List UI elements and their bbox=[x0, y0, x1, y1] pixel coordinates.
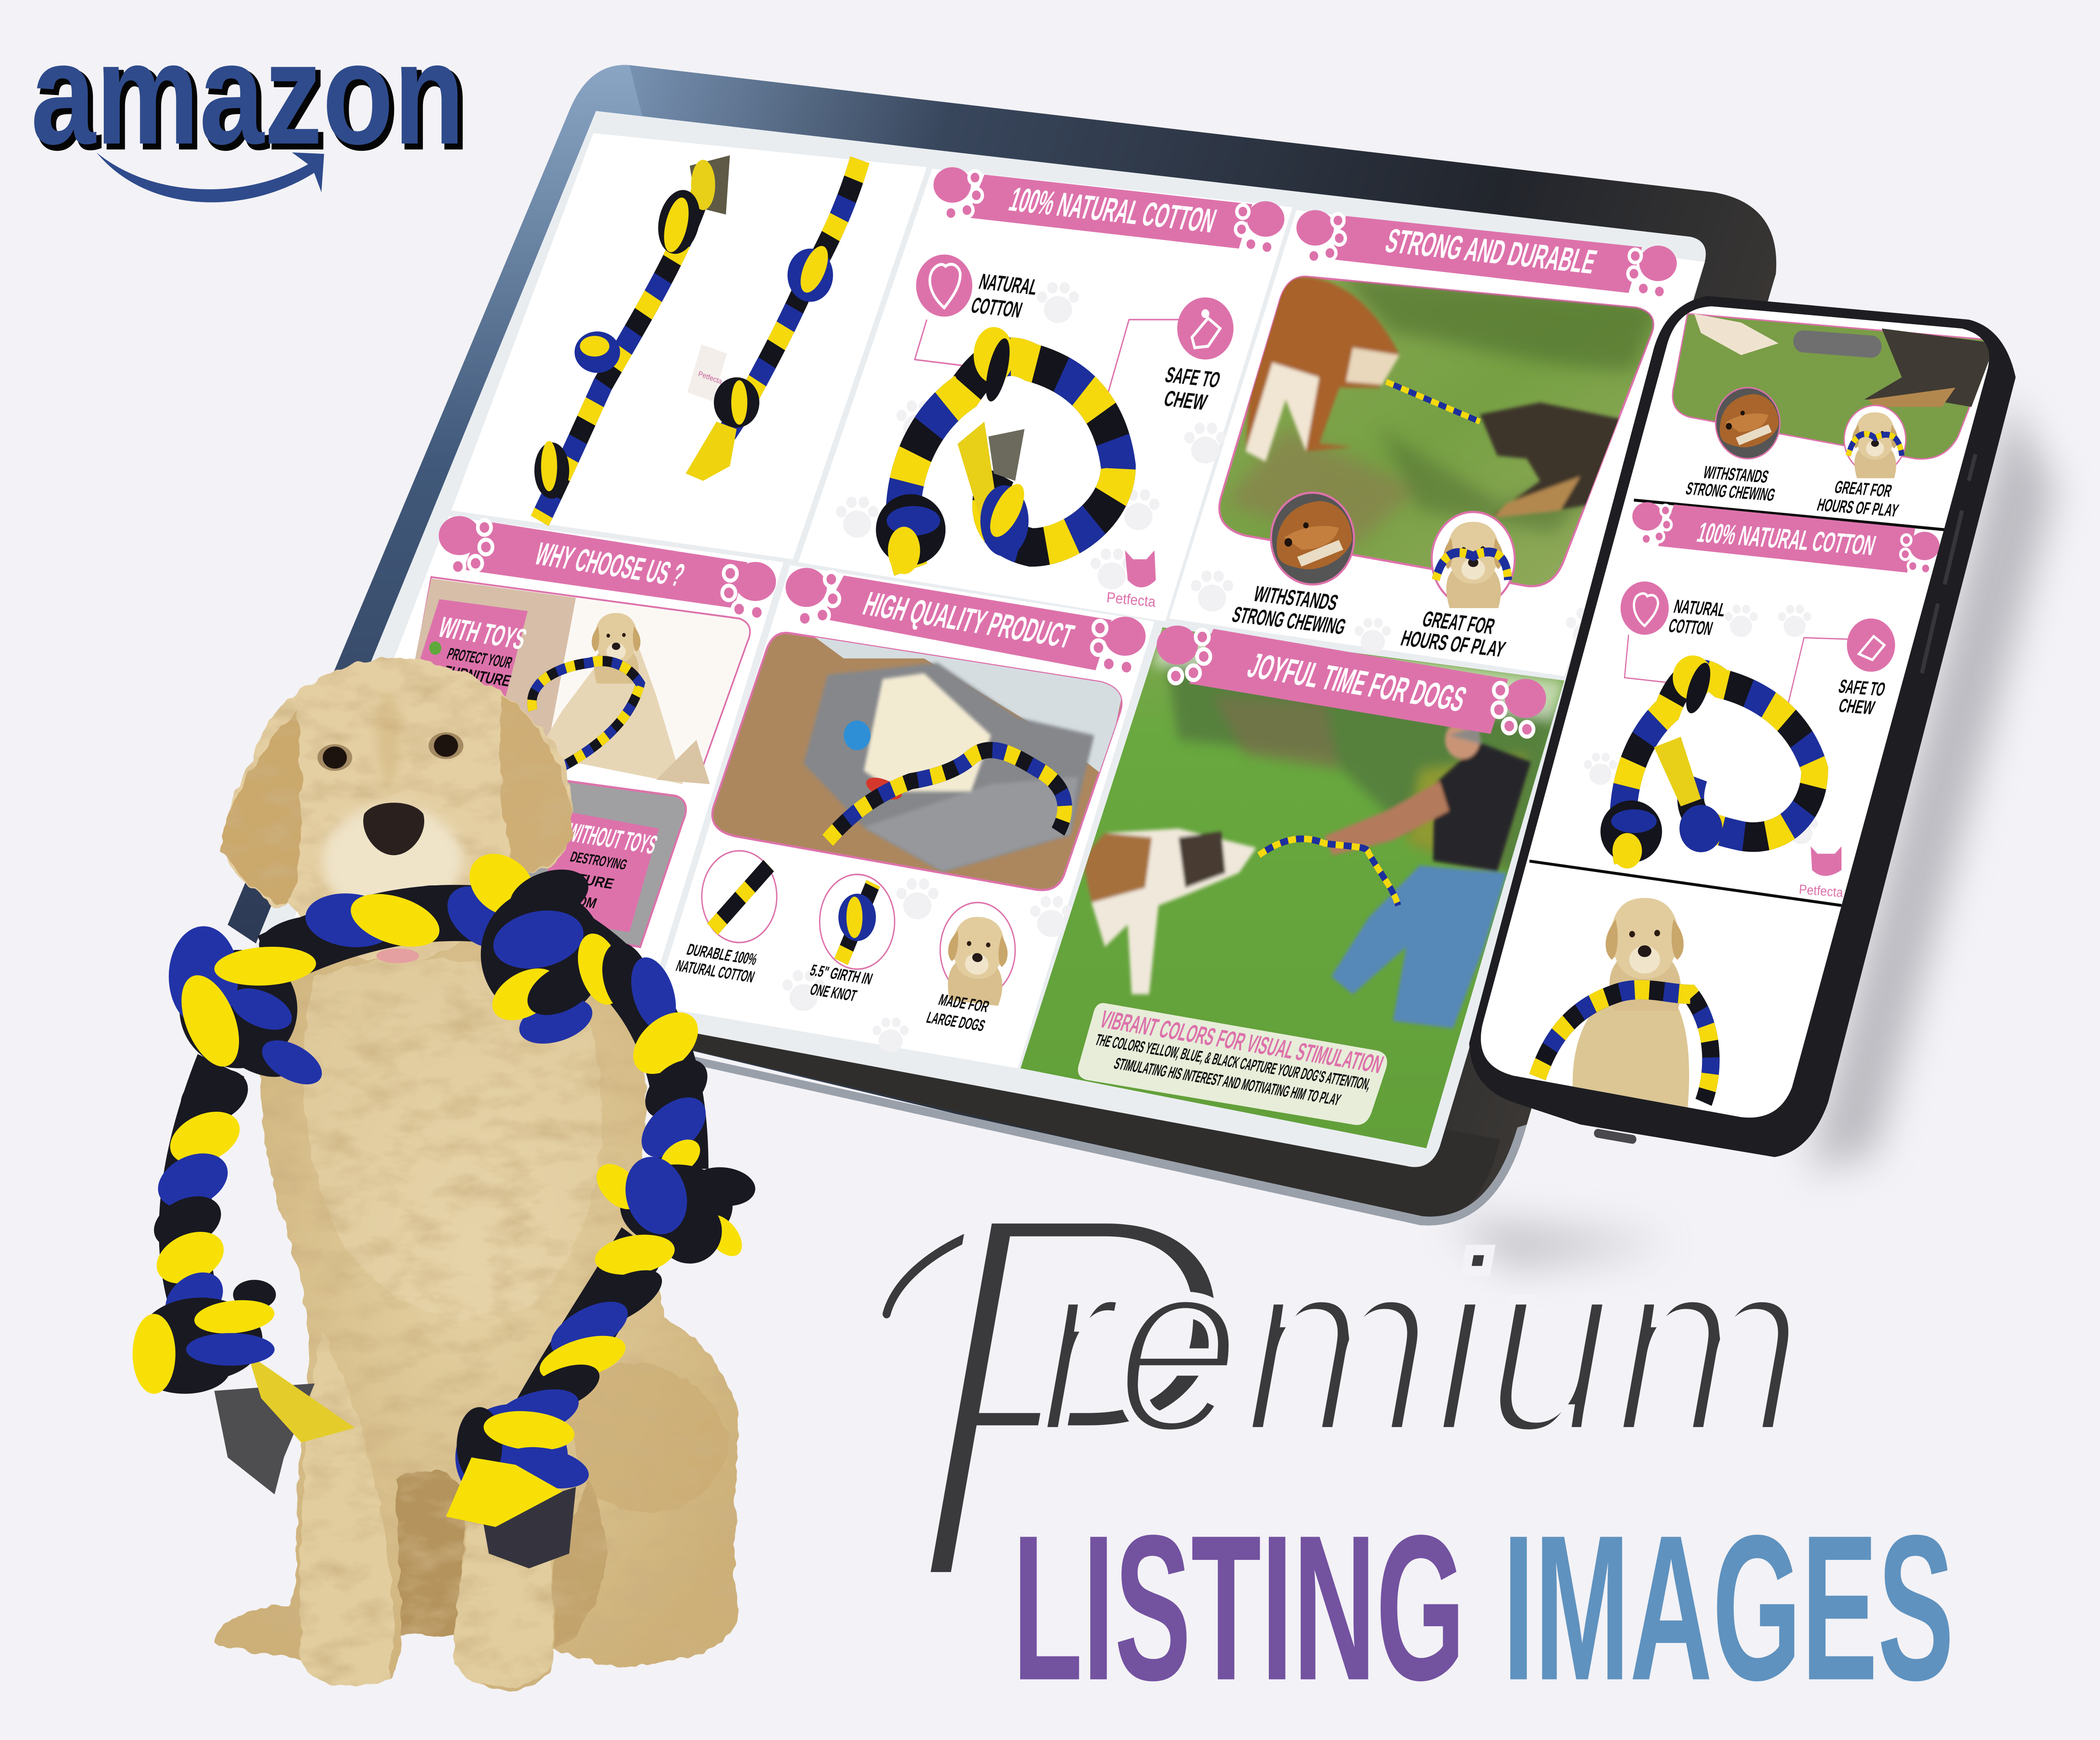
mini rope bbox=[532, 661, 640, 777]
tablet left edge bbox=[228, 65, 643, 947]
Premium word: P bbox=[900, 1091, 1233, 1702]
tablet body bbox=[228, 65, 1776, 1226]
right eye bbox=[428, 732, 463, 759]
with toys card: WITH TOYS bbox=[434, 611, 530, 656]
phone icon: cotton bbox=[1620, 582, 1669, 635]
phone divider one bbox=[1634, 500, 1945, 530]
callout: vibrant colors: THE COLORS YELLOW, BLUE, & BLACK CAPTURE YOUR DOG'S ATTENTION, bbox=[1093, 1031, 1374, 1093]
Petfecta logo: Petfecta bbox=[1106, 590, 1156, 610]
watermark paws bbox=[1191, 571, 1608, 653]
phone label withstands: WITHSTANDS bbox=[1701, 462, 1771, 487]
chest highlight bbox=[303, 958, 602, 1320]
label withstands strong chewing bbox=[1229, 581, 1349, 639]
panel: why choose us bbox=[295, 516, 783, 976]
rope through mouth bbox=[303, 841, 545, 961]
photo: without toys: WITHOUT TOYS bbox=[563, 818, 661, 859]
title: Premium bbox=[887, 1091, 1805, 1702]
label safe to chew bbox=[1161, 362, 1223, 415]
label great for hours of play: GREAT FOR bbox=[1420, 606, 1498, 639]
man bbox=[1325, 721, 1531, 1028]
rope on bed bbox=[828, 750, 1065, 840]
with toys card bbox=[409, 599, 530, 710]
phone label natural cotton bbox=[1666, 596, 1728, 639]
label natural cotton: NATURAL bbox=[976, 269, 1041, 299]
label girth: ONE KNOT bbox=[808, 980, 859, 1005]
phone body bbox=[1469, 296, 2016, 1157]
banner bbox=[1328, 216, 1642, 293]
label large dogs: LARGE DOGS bbox=[924, 1008, 988, 1034]
golden retriever bbox=[214, 658, 739, 1690]
rope left bbox=[540, 185, 703, 521]
phone callout lines bbox=[1625, 635, 1848, 710]
tablet glass bezel bbox=[255, 111, 1706, 1167]
photo: dog in bed bbox=[712, 629, 1125, 890]
phone banner paw left bbox=[1632, 502, 1672, 544]
banner paw left bbox=[1297, 210, 1345, 262]
rope right strand bbox=[570, 927, 717, 1182]
Premium entry swash bbox=[887, 1212, 1092, 1314]
big rope toy bbox=[133, 841, 757, 1568]
phone photo: dogs bbox=[1672, 314, 1995, 459]
circle: chewing dog bbox=[1271, 493, 1354, 585]
phone label withstands bbox=[1684, 462, 1777, 505]
phone banner paw right bbox=[1900, 532, 1940, 574]
left ear bbox=[221, 710, 302, 904]
phone label great for bbox=[1815, 477, 1901, 520]
hang tag with Petfecta logo: Petfecta bbox=[697, 370, 723, 386]
phone label great for: HOURS OF PLAY bbox=[1815, 495, 1901, 520]
label large dogs: MADE FOR bbox=[936, 990, 992, 1016]
hip shading bbox=[562, 1363, 730, 1512]
tablet device bbox=[228, 65, 1776, 1226]
phone notch bbox=[1793, 330, 1882, 359]
banner title: STRONG AND DURABLE bbox=[1381, 221, 1601, 281]
banner bbox=[463, 521, 747, 608]
phone label safe to chew bbox=[1836, 676, 1888, 719]
rope mouth right knot bbox=[481, 861, 605, 1052]
phone divider two bbox=[1530, 861, 1842, 905]
label girth bbox=[808, 961, 875, 1005]
rope frayed ends bbox=[214, 1354, 576, 1568]
phone rope ring bbox=[1623, 674, 1815, 861]
phone screen bbox=[1480, 306, 1995, 1121]
phone circle: chewing dog bbox=[1716, 388, 1780, 459]
phone label great for: GREAT FOR bbox=[1832, 477, 1894, 501]
banner paw right bbox=[1236, 201, 1284, 254]
label durable: DURABLE 100% bbox=[685, 940, 760, 968]
rope bottom knot bbox=[446, 1404, 592, 1527]
phone golden dog bbox=[1572, 898, 1689, 1110]
icon: cotton bbox=[916, 255, 972, 317]
rope knots bbox=[534, 155, 834, 499]
banner paw right bbox=[722, 562, 776, 620]
banner bbox=[821, 575, 1112, 670]
circle: rope detail bbox=[702, 851, 777, 942]
watermark paws bbox=[782, 878, 1072, 1052]
tug rope bbox=[1259, 839, 1398, 905]
panel: natural cotton bbox=[798, 167, 1292, 622]
label withstands strong chewing: WITHSTANDS bbox=[1251, 581, 1341, 615]
rope right knot bbox=[589, 1146, 757, 1264]
phone label safe to chew: CHEW bbox=[1836, 695, 1877, 719]
banner paw left bbox=[786, 568, 840, 626]
banner paw right bbox=[1628, 246, 1677, 298]
tablet silver edge bbox=[690, 1056, 1527, 1226]
circle: golden dog bbox=[1432, 512, 1515, 608]
banner title: JOYFUL TIME FOR DOGS bbox=[1243, 646, 1472, 719]
brown dog bbox=[1246, 277, 1399, 462]
label durable bbox=[674, 940, 760, 986]
circle: golden dog face bbox=[940, 903, 1015, 1006]
photo: dogs tug of war bbox=[1219, 274, 1661, 586]
phone banner title: 100% NATURAL COTTON bbox=[1694, 517, 1879, 561]
phone circle: golden dog bbox=[1844, 405, 1906, 478]
tongue bbox=[376, 948, 419, 963]
cream dog bbox=[864, 673, 991, 792]
Petfecta logo bbox=[1106, 551, 1156, 610]
sofa and dog bbox=[536, 622, 683, 784]
label withstands strong chewing: STRONG CHEWING bbox=[1229, 602, 1349, 639]
rope ring bbox=[903, 357, 1118, 570]
callout: vibrant colors: VIBRANT COLORS FOR VISUAL STIMULATION bbox=[1096, 1006, 1387, 1079]
ring knots and fray bbox=[876, 327, 1031, 574]
phone Petfecta logo: Petfecta bbox=[1798, 882, 1843, 900]
dark dog bbox=[1480, 402, 1634, 518]
watermark paws bbox=[836, 282, 1226, 589]
title: LISTING: LISTING bbox=[1013, 1492, 1465, 1723]
dog head bbox=[225, 658, 572, 962]
icon: safe to chew bbox=[1177, 297, 1234, 360]
label girth: 5.5" GIRTH IN bbox=[808, 961, 875, 988]
banner paw left bbox=[1157, 626, 1210, 683]
phone label natural cotton: COTTON bbox=[1666, 615, 1715, 639]
forehead shade bbox=[377, 695, 401, 792]
photo: without toys: TURE bbox=[575, 871, 616, 892]
grey bed bbox=[803, 663, 1094, 871]
panel: high quality product bbox=[654, 565, 1155, 1068]
label durable: NATURAL COTTON bbox=[674, 956, 757, 986]
callout: vibrant colors bbox=[1078, 1003, 1387, 1125]
phone label safe to chew: SAFE TO bbox=[1836, 676, 1888, 700]
phone icon: safe to chew bbox=[1847, 619, 1895, 672]
callout: vibrant colors: STIMULATING HIS INTEREST AND MOTIVATING HIM TO PLAY bbox=[1112, 1054, 1344, 1109]
banner title: HIGH QUALITY PRODUCT bbox=[858, 585, 1079, 655]
right ear bbox=[500, 695, 573, 873]
banner paw left bbox=[934, 167, 982, 220]
banner title: 100% NATURAL COTTON bbox=[1005, 180, 1221, 240]
dog body bbox=[214, 897, 739, 1690]
photo: without toys: OM bbox=[575, 893, 599, 912]
label great for hours of play bbox=[1398, 606, 1509, 661]
photo: without toys: DESTROYING bbox=[568, 849, 630, 873]
label safe to chew: SAFE TO bbox=[1162, 362, 1223, 392]
with toys card: FURNITURE bbox=[441, 662, 514, 690]
banner bbox=[1189, 629, 1508, 734]
banner paw left bbox=[439, 516, 493, 574]
label natural cotton bbox=[968, 269, 1041, 322]
ball bbox=[844, 721, 871, 750]
phone dog rope bbox=[1538, 989, 1711, 1102]
rope right bbox=[710, 160, 860, 459]
phone watermark paws bbox=[1584, 605, 1818, 844]
banner paw right bbox=[1092, 617, 1146, 674]
hang tag with Petfecta logo bbox=[688, 344, 730, 402]
rope lower right strand bbox=[488, 1229, 677, 1446]
logo smile arrow bbox=[97, 152, 324, 202]
back leg shading bbox=[552, 1480, 606, 1650]
rope left strand bbox=[147, 1060, 255, 1336]
phone label withstands: STRONG CHEWING bbox=[1684, 478, 1777, 505]
nose bbox=[363, 803, 424, 855]
panel: joyful time for dogs bbox=[1021, 626, 1564, 1148]
panel: strong and durable bbox=[1169, 210, 1705, 676]
soft device shadows bbox=[1446, 399, 2056, 1265]
phone bottom port bbox=[1593, 1128, 1637, 1144]
rope bottom left knot bbox=[133, 1280, 276, 1394]
St Bernard bbox=[1082, 829, 1256, 994]
front right leg bbox=[455, 1524, 554, 1687]
with toys card: PROTECT YOUR bbox=[445, 644, 515, 672]
phone device bbox=[1469, 296, 2016, 1157]
dog fur shapes bbox=[214, 658, 739, 1690]
phone Petfecta logo bbox=[1798, 846, 1843, 900]
trees bbox=[1165, 651, 1560, 873]
Premium word: remium bbox=[1038, 1205, 1805, 1486]
phone side buttons bbox=[1922, 454, 1975, 673]
label large dogs bbox=[924, 990, 992, 1034]
left eye bbox=[318, 744, 352, 771]
tug rope bbox=[1386, 382, 1480, 422]
phone banner bbox=[1658, 504, 1915, 572]
tablet lower bezel bbox=[616, 976, 1500, 1220]
circle: knot detail bbox=[820, 874, 895, 969]
label great for hours of play: HOURS OF PLAY bbox=[1398, 626, 1509, 661]
phone label natural cotton: NATURAL bbox=[1672, 596, 1728, 621]
rope top left knot bbox=[169, 909, 347, 1094]
logo wordmark shadow: amazon bbox=[35, 17, 469, 179]
phone ring knots bbox=[1601, 656, 1722, 869]
banner paw right bbox=[1492, 679, 1546, 737]
rope core bbox=[184, 913, 683, 1443]
muzzle bbox=[323, 805, 462, 917]
logo wordmark: amazon bbox=[31, 12, 465, 174]
label natural cotton: COTTON bbox=[968, 293, 1025, 322]
banner title: WHY CHOOSE US ? bbox=[530, 535, 689, 593]
panel: rope product bbox=[452, 133, 927, 559]
callout lines bbox=[915, 320, 1179, 404]
shadow between legs bbox=[395, 1470, 469, 1635]
photo: without toys bbox=[509, 777, 686, 947]
amazon logo bbox=[31, 12, 469, 202]
banner bbox=[967, 175, 1252, 249]
label safe to chew: CHEW bbox=[1161, 386, 1210, 415]
photo: with toys bbox=[402, 577, 750, 784]
front left leg bbox=[300, 1332, 395, 1686]
